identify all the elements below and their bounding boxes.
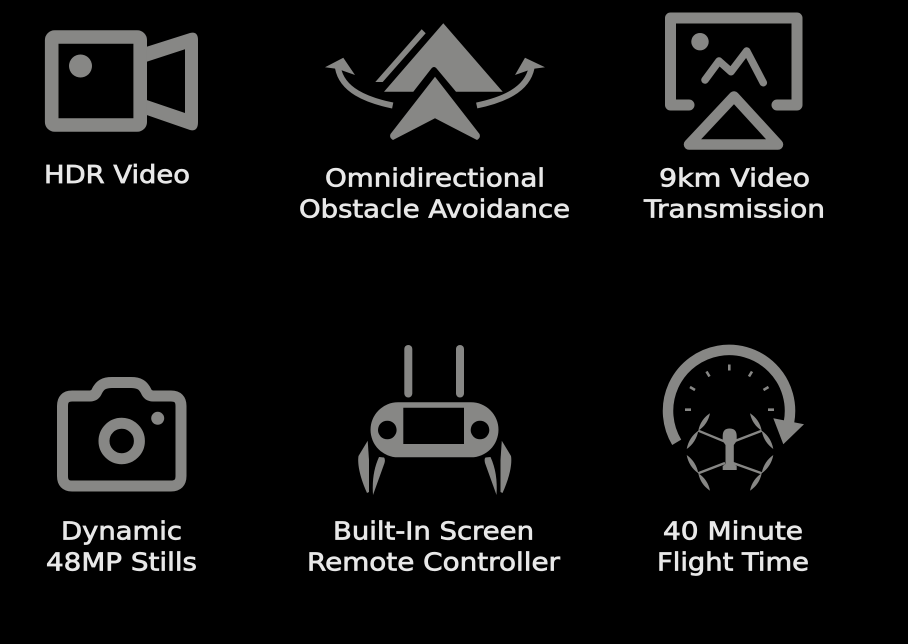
label: Dynamic 48MP Stills: [46, 516, 197, 576]
label: 9km Video Transmission: [643, 164, 825, 224]
icon: remote controller: [358, 345, 511, 495]
icon: video camera: [52, 33, 198, 130]
label: Dynamic 48MP Stills: Dynamic: [61, 516, 182, 546]
label: Omnidirectional Obstacle Avoidance: [299, 164, 570, 224]
icon: camera: [62, 382, 181, 486]
panel: Built-In Screen Remote Controller: [307, 345, 561, 576]
panel: 9km Video Transmission: [643, 18, 825, 224]
label: 40 Minute Flight Time: [657, 516, 809, 576]
label: Omnidirectional Obstacle Avoidance: Obstacle Avoidance: [299, 194, 570, 224]
label: 40 Minute Flight Time: 40 Minute: [663, 516, 803, 546]
label: Built-In Screen Remote Controller: [307, 516, 561, 576]
label: HDR Video: HDR Video: [44, 160, 190, 189]
label: Dynamic 48MP Stills: 48MP Stills: [46, 548, 197, 576]
panel: HDR Video: [44, 33, 198, 189]
label: 9km Video Transmission: Transmission: [643, 194, 825, 224]
icon: video transmission screen: [670, 18, 797, 144]
label: Built-In Screen Remote Controller: Built-In Screen: [333, 516, 534, 546]
label: Omnidirectional Obstacle Avoidance: Omnidirectional: [325, 164, 545, 192]
panel: Dynamic 48MP Stills: [46, 382, 197, 576]
label: 40 Minute Flight Time: Flight Time: [657, 548, 809, 576]
label: Built-In Screen Remote Controller: Remote Controller: [307, 548, 561, 576]
icon: flight time dial and drone: [668, 350, 804, 491]
panel: Omnidirectional Obstacle Avoidance: [299, 23, 570, 223]
panel: 40 Minute Flight Time: [657, 350, 809, 576]
icon: obstacle avoidance arrows: [325, 23, 545, 140]
label: 9km Video Transmission: 9km Video: [659, 164, 810, 192]
